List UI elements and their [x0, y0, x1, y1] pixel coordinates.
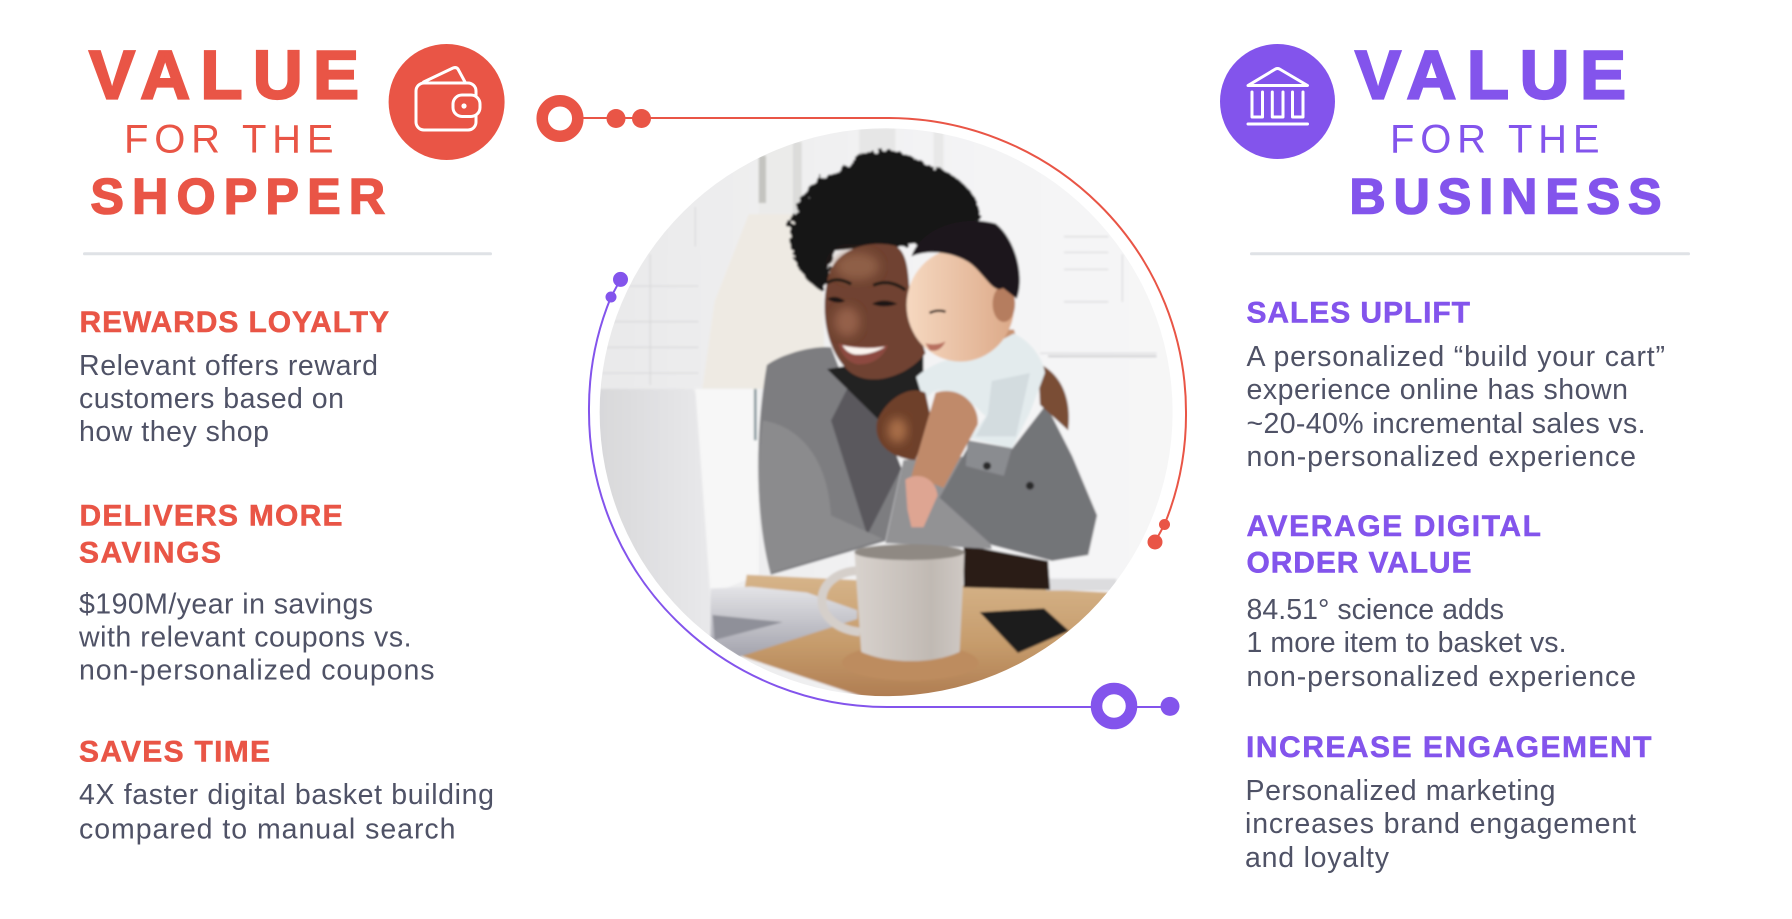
- wall below window: [695, 389, 759, 594]
- benefit: average digital order value: 1 more item to basket vs.: [1246, 627, 1566, 659]
- neck and dark top: [827, 353, 923, 421]
- mother arm under baby: [964, 545, 1050, 590]
- mother sleeve: [940, 405, 1097, 561]
- title: value for the shopper: FOR THE: [124, 118, 334, 162]
- mother shirt: [758, 347, 901, 575]
- benefit: average digital order value: non-personalized experience: [1246, 661, 1636, 693]
- mother face: [825, 244, 926, 379]
- mother hand: [876, 390, 932, 460]
- title: value for the shopper: [89, 36, 385, 224]
- benefit: delivers more savings: DELIVERS MORE: [80, 499, 342, 532]
- benefit: delivers more savings: non-personalized coupons: [79, 655, 434, 687]
- benefit: sales uplift: experience online has shown: [1246, 374, 1628, 406]
- table: [742, 574, 1108, 696]
- benefit: average digital order value: AVERAGE DIGITAL: [1246, 510, 1541, 543]
- hair: [790, 150, 982, 291]
- laptop base: [711, 587, 857, 657]
- benefit: increase engagement: [1245, 731, 1652, 874]
- icon: wallet: [389, 44, 505, 160]
- title: value for the business: BUSINESS: [1350, 168, 1662, 224]
- photo: mother and baby at a laptop: [590, 120, 1185, 713]
- benefit: rewards loyalty: Relevant offers reward: [79, 350, 378, 382]
- benefit: sales uplift: SALES UPLIFT: [1246, 297, 1470, 330]
- baby hand: [905, 476, 938, 527]
- benefit: rewards loyalty: customers based on: [79, 383, 344, 415]
- benefit: rewards loyalty: how they shop: [79, 416, 269, 448]
- icon: bank building: [1220, 44, 1335, 159]
- title: value for the business: [1350, 36, 1662, 224]
- laptop lid: [600, 389, 674, 603]
- connector: purple arc with dots: [589, 272, 1180, 724]
- benefit: increase engagement: Personalized marketing: [1246, 775, 1556, 807]
- benefit: average digital order value: 84.51° science adds: [1246, 594, 1504, 626]
- benefit: delivers more savings: [78, 499, 434, 687]
- wooden coaster: [850, 652, 971, 657]
- title: value for the business: FOR THE: [1390, 118, 1600, 162]
- title: value for the shopper: VALUE: [89, 36, 359, 114]
- title: value for the shopper: SHOPPER: [90, 168, 385, 224]
- benefit: average digital order value: ORDER VALUE: [1246, 547, 1472, 580]
- benefit: saves time: 4X faster digital basket building: [79, 779, 494, 811]
- baby front arm: [911, 391, 978, 488]
- benefit: sales uplift: A personalized “build your cart”: [1246, 341, 1665, 373]
- baby tee: [916, 334, 1045, 448]
- macrame hanging: [703, 214, 825, 389]
- benefit: delivers more savings: SAVINGS: [79, 537, 221, 570]
- benefit: increase engagement: and loyalty: [1245, 842, 1390, 874]
- benefit: delivers more savings: $190M/year in savings: [79, 588, 373, 620]
- divider: [83, 252, 492, 255]
- divider: [1250, 252, 1690, 255]
- window background: [590, 120, 1185, 705]
- baby other arm: [1038, 363, 1069, 430]
- baby pants: [885, 456, 992, 549]
- phone: [980, 608, 1069, 653]
- benefit: saves time: compared to manual search: [79, 813, 456, 845]
- benefit: increase engagement: increases brand engagement: [1245, 808, 1636, 840]
- baby neck: [1003, 328, 1016, 340]
- benefit: sales uplift: non-personalized experience: [1246, 441, 1636, 473]
- baby head: [907, 249, 1014, 362]
- title: value for the business: VALUE: [1355, 36, 1626, 114]
- benefit: saves time: [79, 736, 494, 845]
- benefit: average digital order value: [1246, 510, 1636, 693]
- benefit: rewards loyalty: REWARDS LOYALTY: [80, 306, 389, 339]
- benefit: saves time: SAVES TIME: [79, 736, 270, 769]
- panel: value for the business: [1220, 36, 1690, 874]
- benefit: increase engagement: INCREASE ENGAGEMENT: [1246, 731, 1652, 764]
- benefit: sales uplift: ~20-40% incremental sales vs.: [1246, 408, 1646, 440]
- panel: value for the shopper: [78, 36, 505, 845]
- connector: red arc with dots: [542, 101, 1186, 549]
- benefit: delivers more savings: with relevant coupons vs.: [78, 621, 412, 653]
- benefit: sales uplift: [1246, 297, 1665, 473]
- benefit: rewards loyalty: [79, 306, 389, 448]
- mug: [822, 544, 964, 661]
